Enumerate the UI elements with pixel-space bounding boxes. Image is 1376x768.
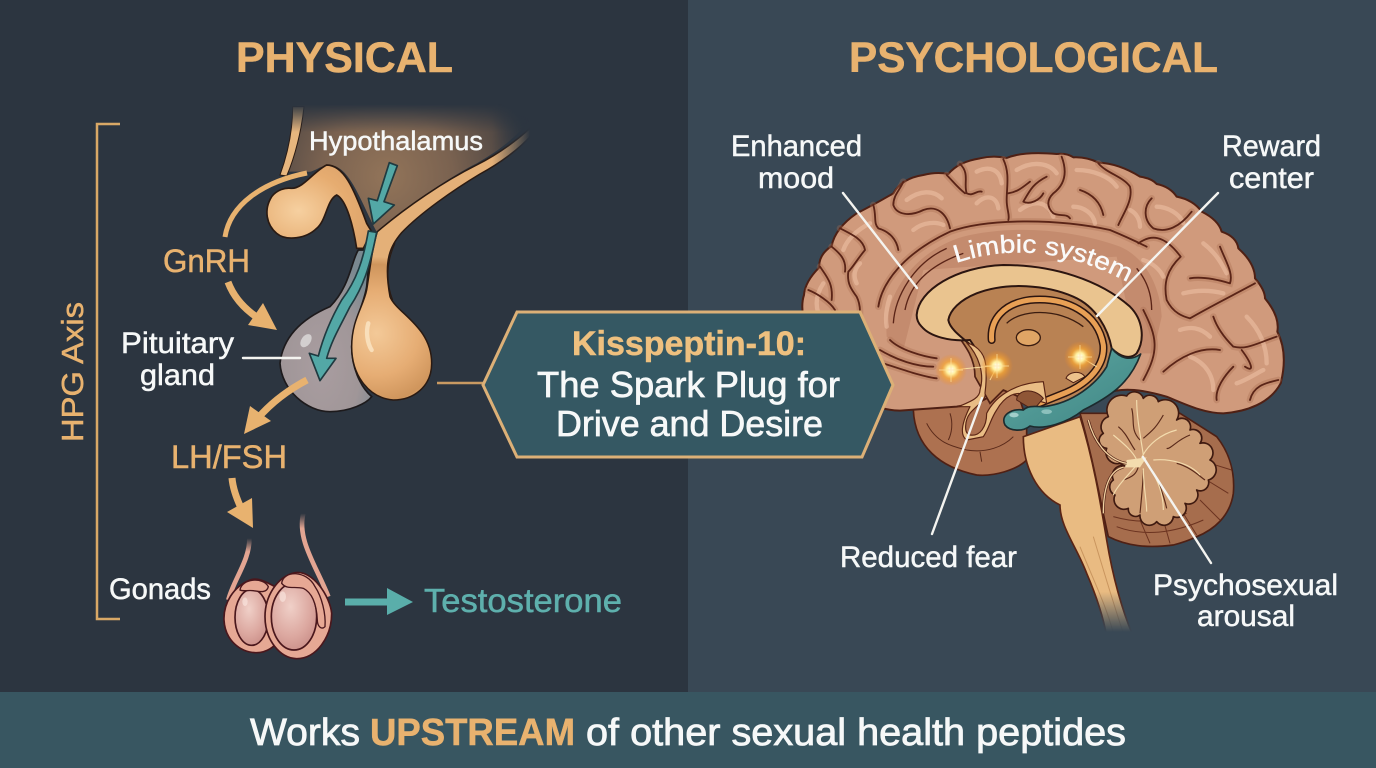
left spermatic cord [228,538,249,600]
heading: physical: PHYSICAL [236,34,453,82]
callout subtitle: The Spark Plug for [537,364,840,405]
activation glow: frontal [935,354,967,386]
hippocampus [1004,348,1141,430]
left testis sac [224,579,278,653]
cerebellum tree [1088,392,1216,525]
cerebellum base, striated [913,380,1234,546]
callout subtitle: Drive and Desire [556,403,823,444]
left epididymis [240,580,268,592]
label: Testosterone: Testosterone [424,582,622,619]
activation connector [951,357,1097,380]
upper tan bulb with stalk [267,165,372,248]
label: Psychosexual arousal [1153,569,1338,633]
pointer line: reward center [1097,193,1218,316]
label: Enhanced mood [731,130,862,195]
label: GnRH: GnRH [163,243,250,279]
HPG axis bracket [97,124,120,619]
left hypothalamus wall [280,107,304,176]
right testis [271,583,317,650]
label: HPG Axis: HPG Axis [55,302,90,442]
label: Pituitary gland: gland [140,359,215,392]
activation glow: reward [1064,341,1096,373]
gyrus highlights [817,164,1267,390]
label: Limbic system: Limbic system [953,234,1131,282]
gray highlight [300,334,312,348]
right spermatic cord [302,513,328,597]
callout title: Kisspeptin-10: [572,325,806,363]
limbic band [886,230,1162,353]
teal arrow: upper [368,163,397,224]
dark nub [1017,391,1043,410]
cortical folds [808,157,1278,400]
fold shading [808,157,1278,400]
label: Psychosexual arousal: Psychosexual [1153,569,1338,602]
label: Reward center [1222,130,1321,195]
label: Enhanced mood: Enhanced [731,130,862,163]
callout hexagon [483,312,893,457]
brainstem [1023,417,1133,637]
fornix [992,300,1103,405]
callout subtitle [537,364,840,444]
thalamic nucleus [1016,330,1040,346]
heading: psychological: PSYCHOLOGICAL [849,34,1218,82]
label: Gonads: Gonads [109,573,211,606]
footer text: UPSTREAM [370,712,575,754]
label: Reward center: center [1229,162,1314,195]
zigzag tan structure [958,343,1047,440]
label: LH/FSH: LH/FSH [171,439,287,475]
right testis sac [265,572,332,659]
small nucleus by hippocampus [1066,372,1085,383]
anterior pituitary [280,250,372,412]
hypothalamus tissue [285,103,530,232]
footer text: of other sexual health peptides [586,712,1126,754]
posterior pituitary with right wall [352,128,532,400]
teal arrow: lower [309,231,377,381]
arrow: gonads to testosterone [345,588,413,615]
panel: physical background [0,0,688,692]
illustration: gonads [224,513,332,659]
illustration: brain [802,153,1284,637]
pointer line: enhanced mood [843,193,917,288]
label: Hypothalamus: Hypothalamus [309,126,483,156]
corpus callosum [917,265,1142,357]
label: Reduced fear: Reduced fear [840,541,1017,574]
right epididymis [282,574,325,628]
interior midbrain area [947,283,1123,413]
pointer line: pituitary [243,357,300,359]
central callout: Kisspeptin-10 [483,312,893,457]
arrow: pituitary to LH/FSH [244,380,307,434]
arrow: LH/FSH to gonads [227,478,253,528]
label: Psychosexual arousal: arousal [1197,600,1295,633]
pointer line: reduced fear [932,398,982,534]
temporal lobe [913,380,1027,475]
footer band [0,692,1376,768]
activation glow: amygdala [981,350,1013,382]
pointer line: psychosexual arousal [1143,457,1211,563]
footer text [250,712,1126,754]
connector to central box [437,382,484,384]
arrow: GnRH to pituitary [228,282,277,330]
panel: psychological background [688,0,1376,692]
arrow: hypothalamus to GnRH [225,173,307,237]
label: Pituitary gland [121,327,234,392]
footer text: Works [250,712,360,754]
left testis [235,589,268,645]
illustration: hypothalamus and pituitary [267,103,532,412]
label: Reward center: Reward [1222,130,1321,163]
cerebrum [802,153,1284,440]
limbic band lines [893,248,1152,323]
label: Enhanced mood: mood [758,162,834,195]
label: Pituitary gland: Pituitary [121,327,234,360]
